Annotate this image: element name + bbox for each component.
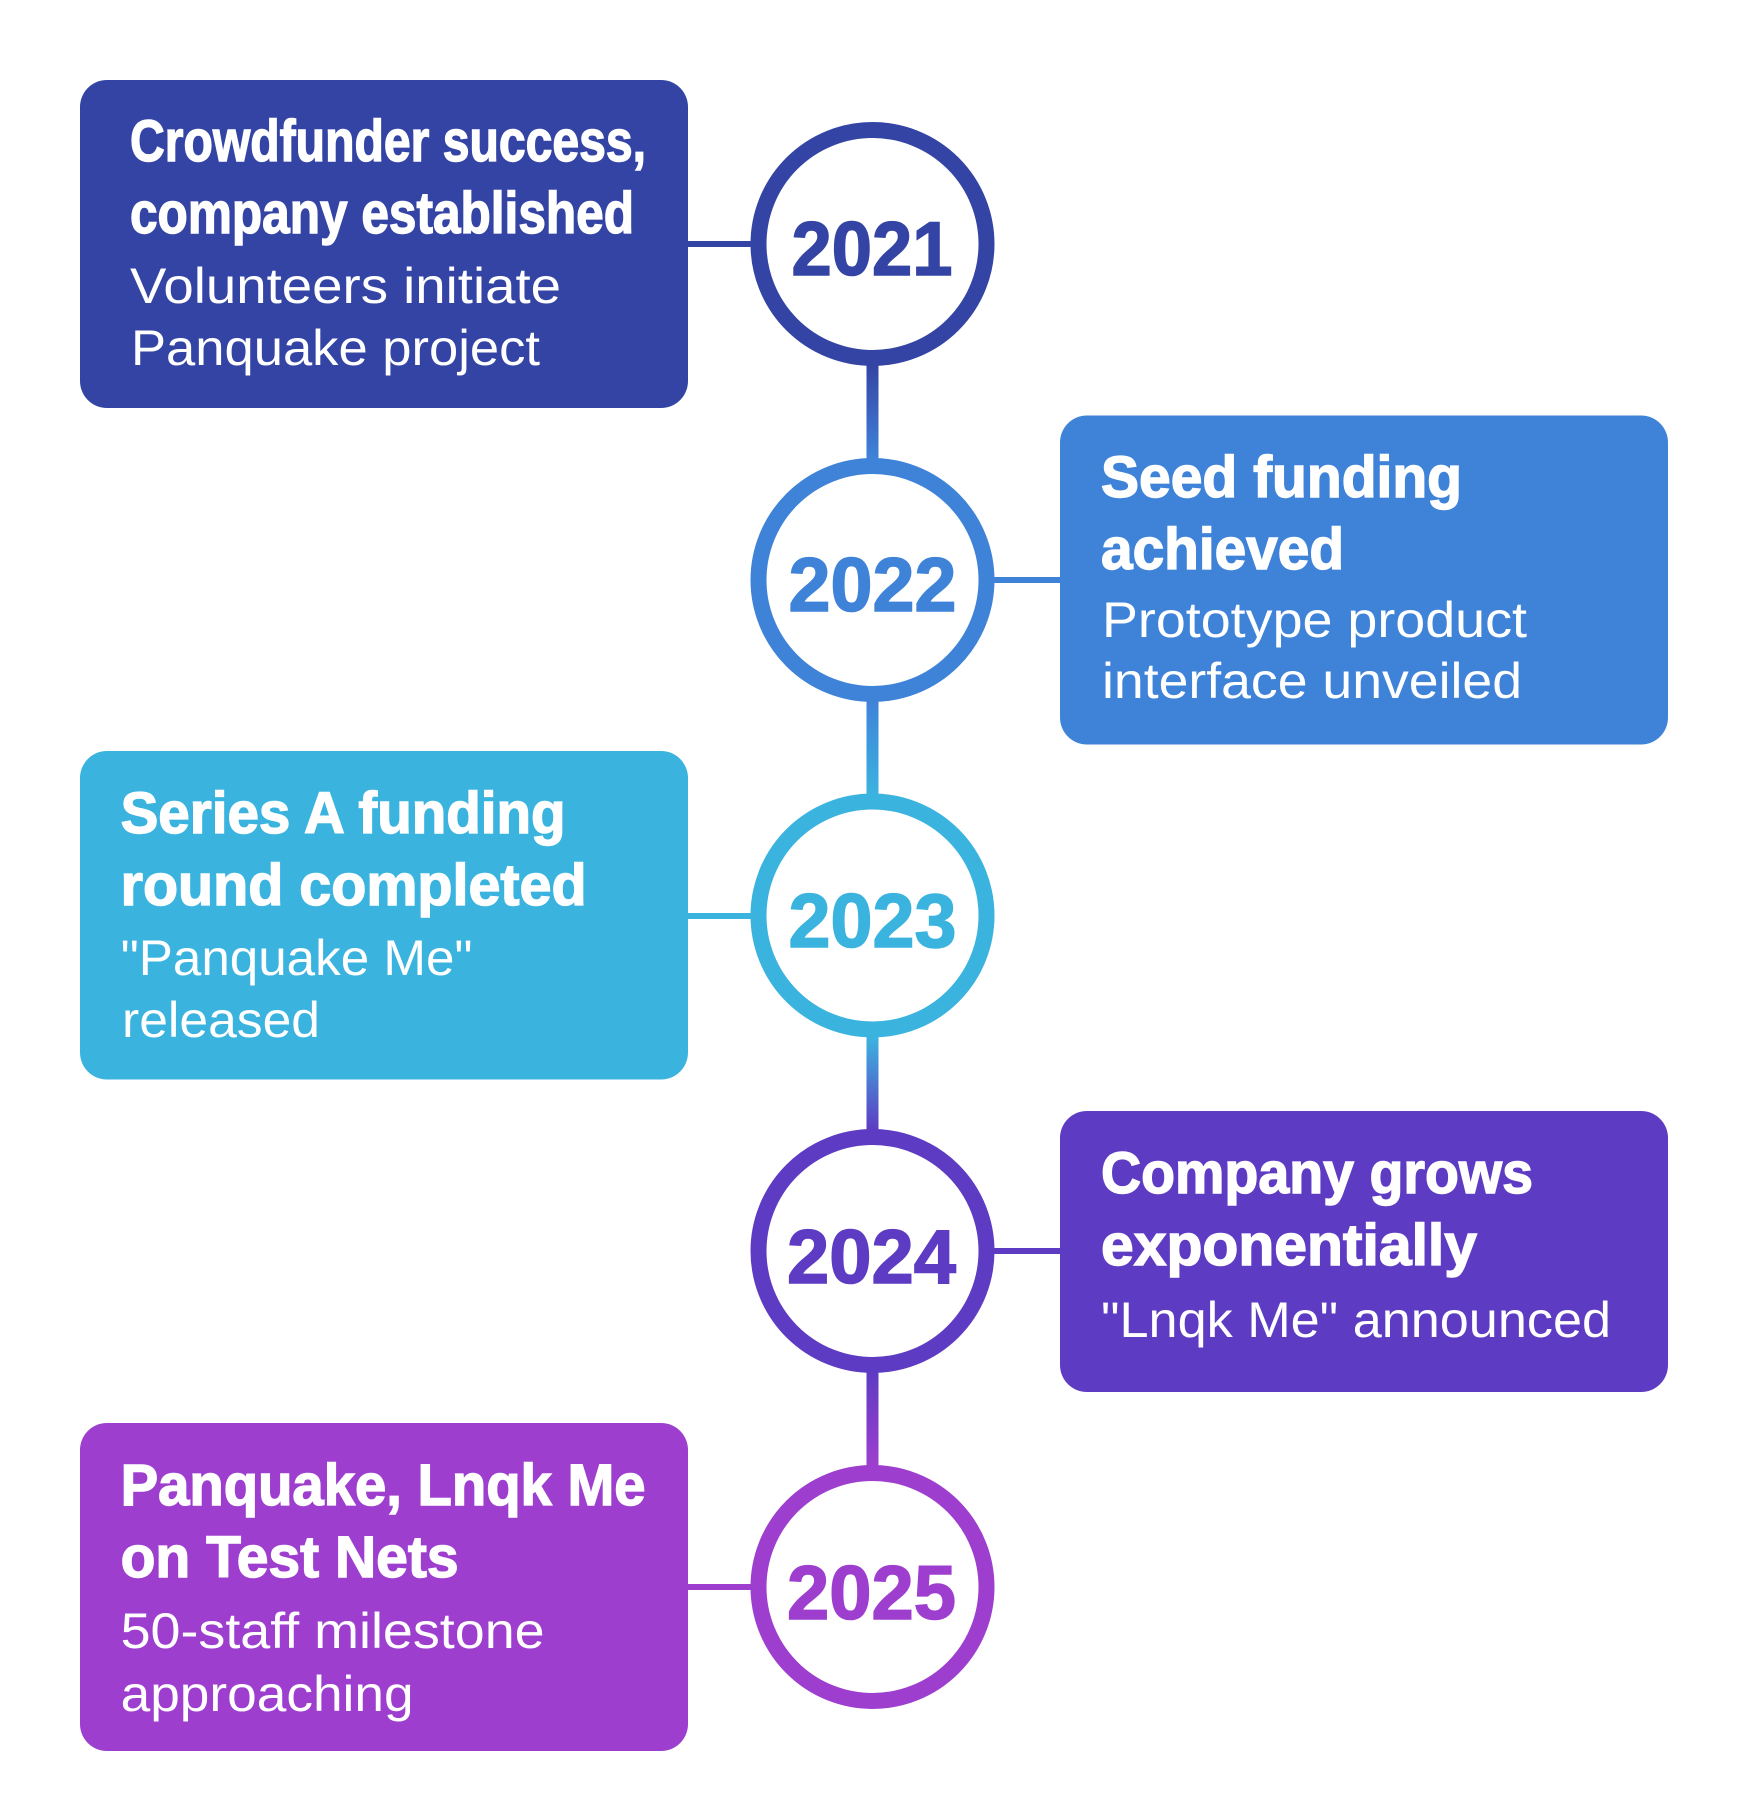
year node: 2021 [758,130,986,358]
heading: 2021: Crowdfunder success, [130,109,646,174]
vertical connector: 2022 to 2023 [866,698,878,798]
body text: 2024: "Lnqk Me" announced [1101,1292,1611,1348]
vertical connector: 2023 to 2024 [866,1034,878,1134]
horizontal connector: 2023 [686,913,756,919]
heading: 2022: achieved [1101,517,1344,582]
body text: 2025: 50-staff milestone [121,1603,545,1659]
heading: 2024: Company grows [1101,1141,1533,1206]
year node: 2025 [758,1473,986,1701]
year node: 2022 [758,466,986,694]
heading: 2024: exponentially [1101,1213,1477,1278]
body text: 2021: Volunteers initiate [130,258,561,314]
heading: 2023 [121,781,587,918]
heading: 2024 [1101,1141,1533,1278]
heading: 2025: Panquake, Lnqk Me [121,1453,646,1518]
horizontal connector: 2024 [990,1248,1062,1254]
body text: 2022: interface unveiled [1102,653,1522,709]
heading: 2022 [1101,445,1462,582]
body text: 2023: "Panquake Me" [121,930,473,986]
panel: 2024 milestone [1060,1111,1668,1392]
year node: 2024 [758,1137,986,1365]
year node: 2023 [758,802,986,1030]
heading: 2022: Seed funding [1101,445,1462,510]
body text: 2023: released [122,992,320,1048]
heading: 2023: Series A funding [121,781,566,846]
panel: 2022 milestone [1060,416,1668,744]
heading: 2025: on Test Nets [121,1525,459,1590]
panel: 2025 milestone [80,1423,688,1751]
body text: 2021 [130,258,561,376]
heading: 2021: company established [130,181,634,246]
body text: 2023 [121,930,473,1048]
year node: 2022: 2022 [788,543,956,628]
year node: 2025: 2025 [787,1551,956,1636]
body text: 2022: Prototype product [1102,592,1527,648]
heading: 2023: round completed [121,853,587,918]
body text: 2021: Panquake project [131,320,540,376]
body text: 2025: approaching [121,1666,414,1722]
year node: 2023: 2023 [788,879,956,964]
vertical connector: 2024 to 2025 [866,1369,878,1469]
year node: 2024: 2024 [787,1215,956,1300]
vertical connector: 2021 to 2022 [866,362,878,462]
horizontal connector: 2025 [686,1584,756,1590]
heading: 2021 [130,109,646,246]
heading: 2025 [121,1453,646,1590]
year node: 2021: 2021 [792,207,952,292]
body text: 2025 [121,1603,545,1722]
horizontal connector: 2021 [686,241,756,247]
body text: 2022 [1102,592,1527,709]
panel: 2021 milestone [80,80,688,408]
panel: 2023 milestone [80,751,688,1080]
horizontal connector: 2022 [990,577,1062,583]
